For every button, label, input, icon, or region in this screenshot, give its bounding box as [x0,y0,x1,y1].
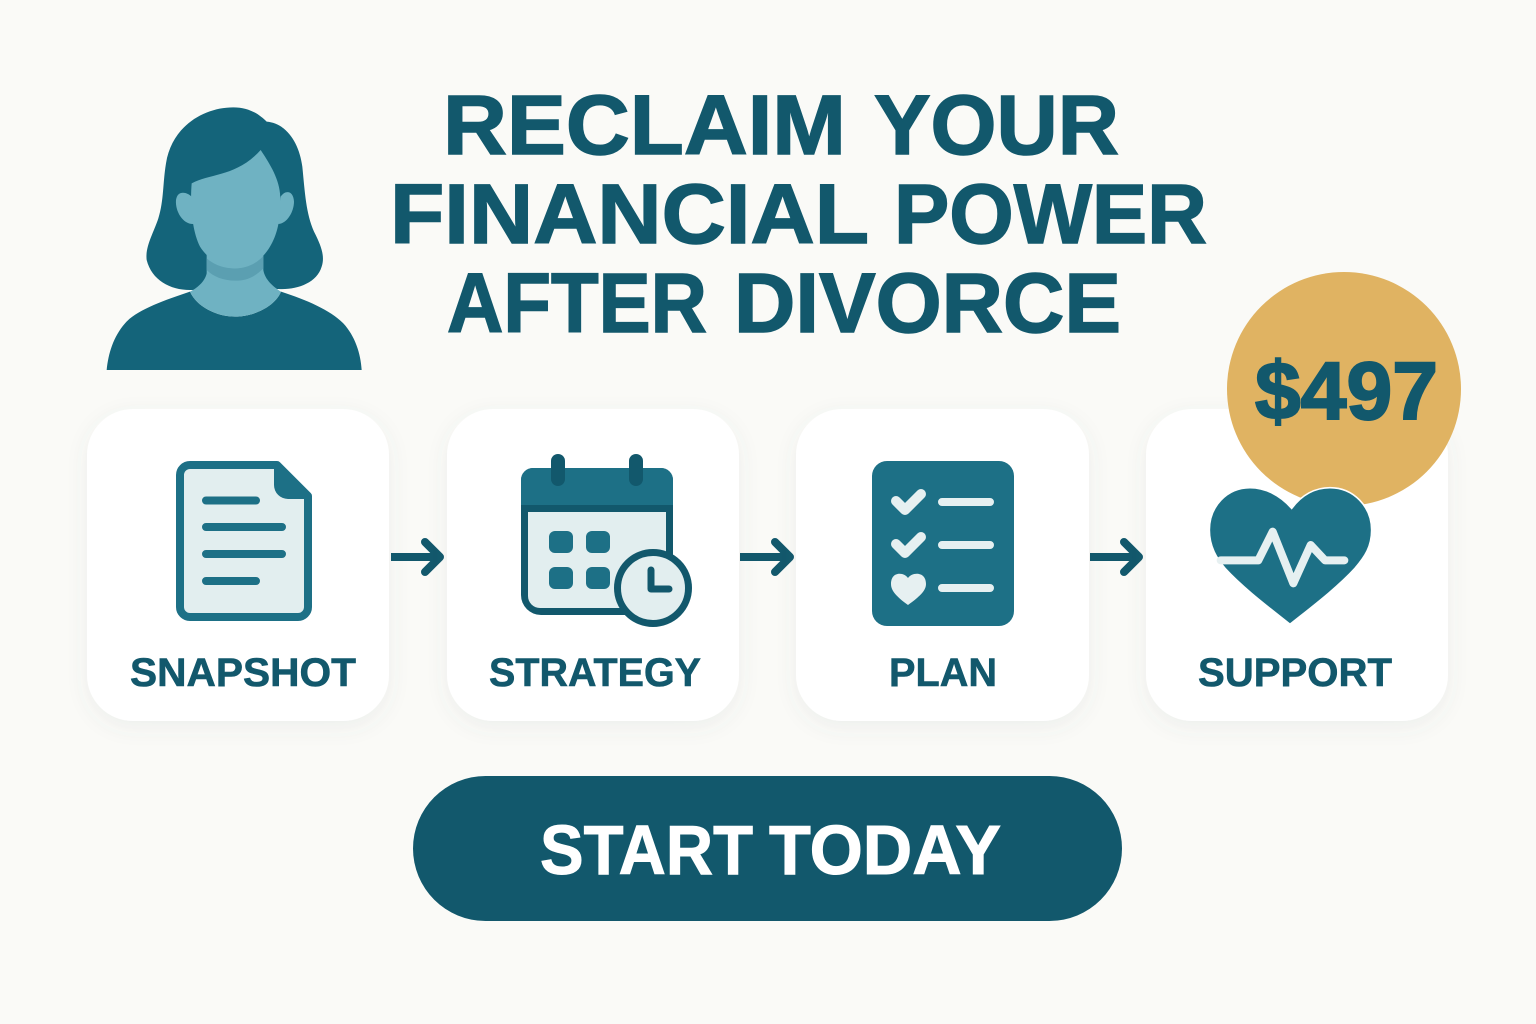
icon: woman portrait [107,107,362,370]
title: YOUR [874,78,1119,172]
panel: strategy [447,409,739,721]
arrow: strategy to plan [740,542,790,572]
arrow: plan to support [1090,542,1139,572]
icon: calendar with clock [521,454,688,624]
title: RECLAIM [443,78,846,172]
label: strategy: STRATEGY [489,651,701,695]
title [390,78,1207,350]
button: start today: START [540,811,753,889]
panel: support [1146,409,1448,721]
label: snapshot: SNAPSHOT [130,651,356,695]
arrow: snapshot to strategy [391,542,440,572]
title: AFTER [447,256,707,350]
icon: heart with pulse [1209,488,1372,624]
label: support: SUPPORT [1198,651,1392,695]
title: POWER [894,167,1207,261]
icon: document [180,463,312,617]
title: DIVORCE [734,256,1121,350]
title: FINANCIAL [390,167,869,261]
panel: snapshot [87,409,389,721]
button: start today: TODAY [769,811,1001,889]
icon: checklist [872,461,1014,626]
label: plan: PLAN [889,651,997,695]
price badge [1227,272,1461,506]
panel: plan [796,409,1089,721]
price badge: $497 [1255,346,1438,437]
button: start today [413,776,1122,921]
